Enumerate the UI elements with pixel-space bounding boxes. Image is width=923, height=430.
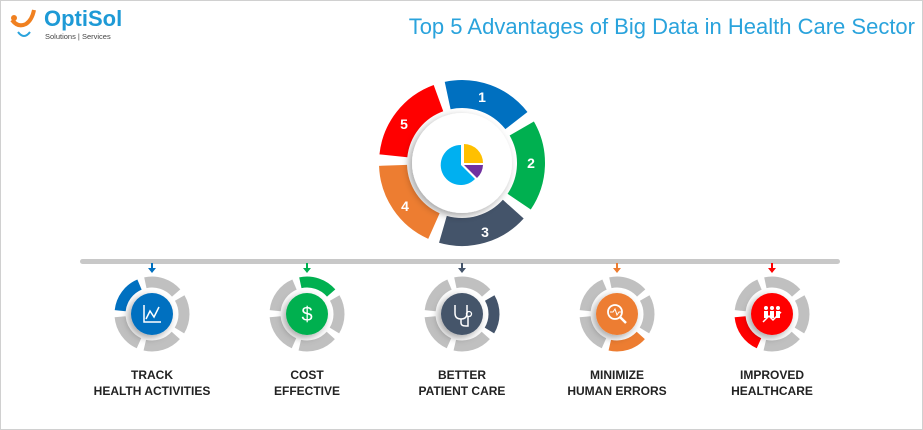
main donut xyxy=(365,66,559,260)
label 5: IMPROVED xyxy=(740,368,804,382)
label 5 xyxy=(731,368,813,398)
label 2: EFFECTIVE xyxy=(274,384,340,398)
icon ring 5 xyxy=(727,269,817,359)
icon ring 2 xyxy=(262,269,352,359)
logo: Solutions | Services xyxy=(45,32,111,41)
label 2 xyxy=(274,368,340,398)
icon ring 1 xyxy=(107,269,197,359)
label 4: HUMAN ERRORS xyxy=(567,384,667,398)
label 5: HEALTHCARE xyxy=(731,384,813,398)
main donut: 5 xyxy=(400,116,408,132)
logo xyxy=(10,6,122,41)
icon: pie chart xyxy=(441,144,483,185)
icon ring 4 xyxy=(572,269,662,359)
main donut: 4 xyxy=(401,198,409,214)
label 1: TRACK xyxy=(131,368,173,382)
label 3 xyxy=(419,368,505,398)
label 3: PATIENT CARE xyxy=(419,384,505,398)
label 1 xyxy=(94,368,210,398)
label 3: BETTER xyxy=(438,368,486,382)
main donut: 1 xyxy=(478,89,486,105)
main donut: 3 xyxy=(481,224,489,240)
timeline line xyxy=(80,259,840,273)
icon ring 2: $ xyxy=(301,304,313,326)
label 4: MINIMIZE xyxy=(590,368,644,382)
main donut: 2 xyxy=(527,155,535,171)
label 1: HEALTH ACTIVITIES xyxy=(94,384,210,398)
label 2: COST xyxy=(290,368,324,382)
icon ring 3 xyxy=(417,269,507,359)
label 4 xyxy=(567,368,667,398)
title: Top 5 Advantages of Big Data in Health Care Sector xyxy=(409,14,915,39)
logo: OptiSol xyxy=(44,6,122,31)
